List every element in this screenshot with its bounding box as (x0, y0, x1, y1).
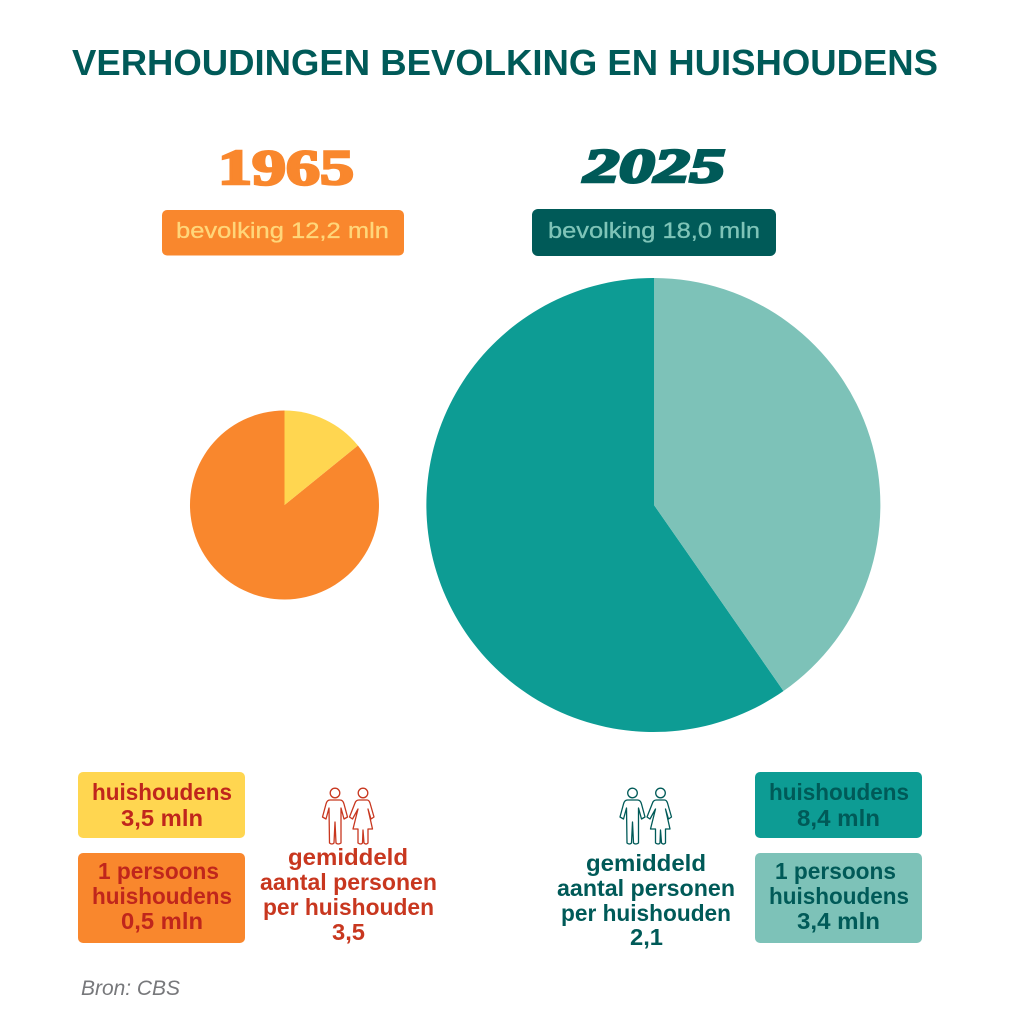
box: huishoudens 2025: 8,4 mln (797, 805, 880, 831)
year 2025: 2025 (583, 140, 725, 193)
pie slice: 1 persoons huishoudens 1965 (284, 410, 358, 505)
panel: 1965 header (162, 139, 404, 256)
box: 1 persoons huishoudens 1965: huishoudens (92, 883, 232, 909)
source note: Bron: CBS (81, 977, 180, 1000)
box: 1 persoons huishoudens 2025: 1 persoons (775, 858, 896, 884)
text: gemiddeld aantal personen 1965: gemiddeld (288, 844, 408, 870)
text: gemiddeld aantal personen 1965: 3,5 (332, 919, 365, 945)
panel: 2025 header (532, 140, 776, 256)
text: gemiddeld aantal personen 2025: per huishouden (561, 900, 731, 926)
text: gemiddeld aantal personen 2025: gemiddeld (586, 850, 706, 876)
pie chart: 2025 (426, 278, 880, 732)
icon: people 2025 (620, 788, 672, 844)
text: gemiddeld aantal personen 2025 (557, 850, 735, 950)
icon: people 1965 (322, 788, 374, 844)
box: 1 persoons huishoudens 2025: huishoudens (769, 883, 909, 909)
box: huishoudens 2025: huishoudens (769, 779, 909, 805)
box: 1 persoons huishoudens 1965: 0,5 mln (121, 908, 203, 934)
box: huishoudens 1965: huishoudens (92, 779, 232, 805)
pie slice: 1 persoons huishoudens 2025 (654, 278, 880, 691)
box: huishoudens 1965: 3,5 mln (121, 805, 203, 831)
badge: bevolking 2025 (532, 209, 776, 256)
text: gemiddeld aantal personen 2025: 2,1 (630, 924, 663, 950)
box: huishoudens 2025 (755, 772, 922, 838)
box: 1 persoons huishoudens 1965 (78, 853, 245, 943)
box: 1 persoons huishoudens 2025 (755, 853, 922, 943)
box: 1 persoons huishoudens 1965: 1 persoons (98, 858, 219, 884)
text: gemiddeld aantal personen 2025: aantal personen (557, 875, 735, 901)
badge: bevolking 1965: bevolking 12,2 mln (176, 218, 389, 243)
year 1965: 1965 (218, 139, 354, 195)
box: 1 persoons huishoudens 2025: 3,4 mln (797, 908, 880, 934)
pie chart: 1965 (190, 410, 379, 599)
box: huishoudens 1965 (78, 772, 245, 838)
text: gemiddeld aantal personen 1965: aantal personen (260, 869, 437, 895)
text: gemiddeld aantal personen 1965: per huishouden (263, 894, 434, 920)
badge: bevolking 2025: bevolking 18,0 mln (548, 218, 760, 243)
text: gemiddeld aantal personen 1965 (260, 844, 437, 945)
title: VERHOUDINGEN BEVOLKING EN HUISHOUDENS (72, 42, 938, 83)
badge: bevolking 1965 (162, 210, 404, 256)
